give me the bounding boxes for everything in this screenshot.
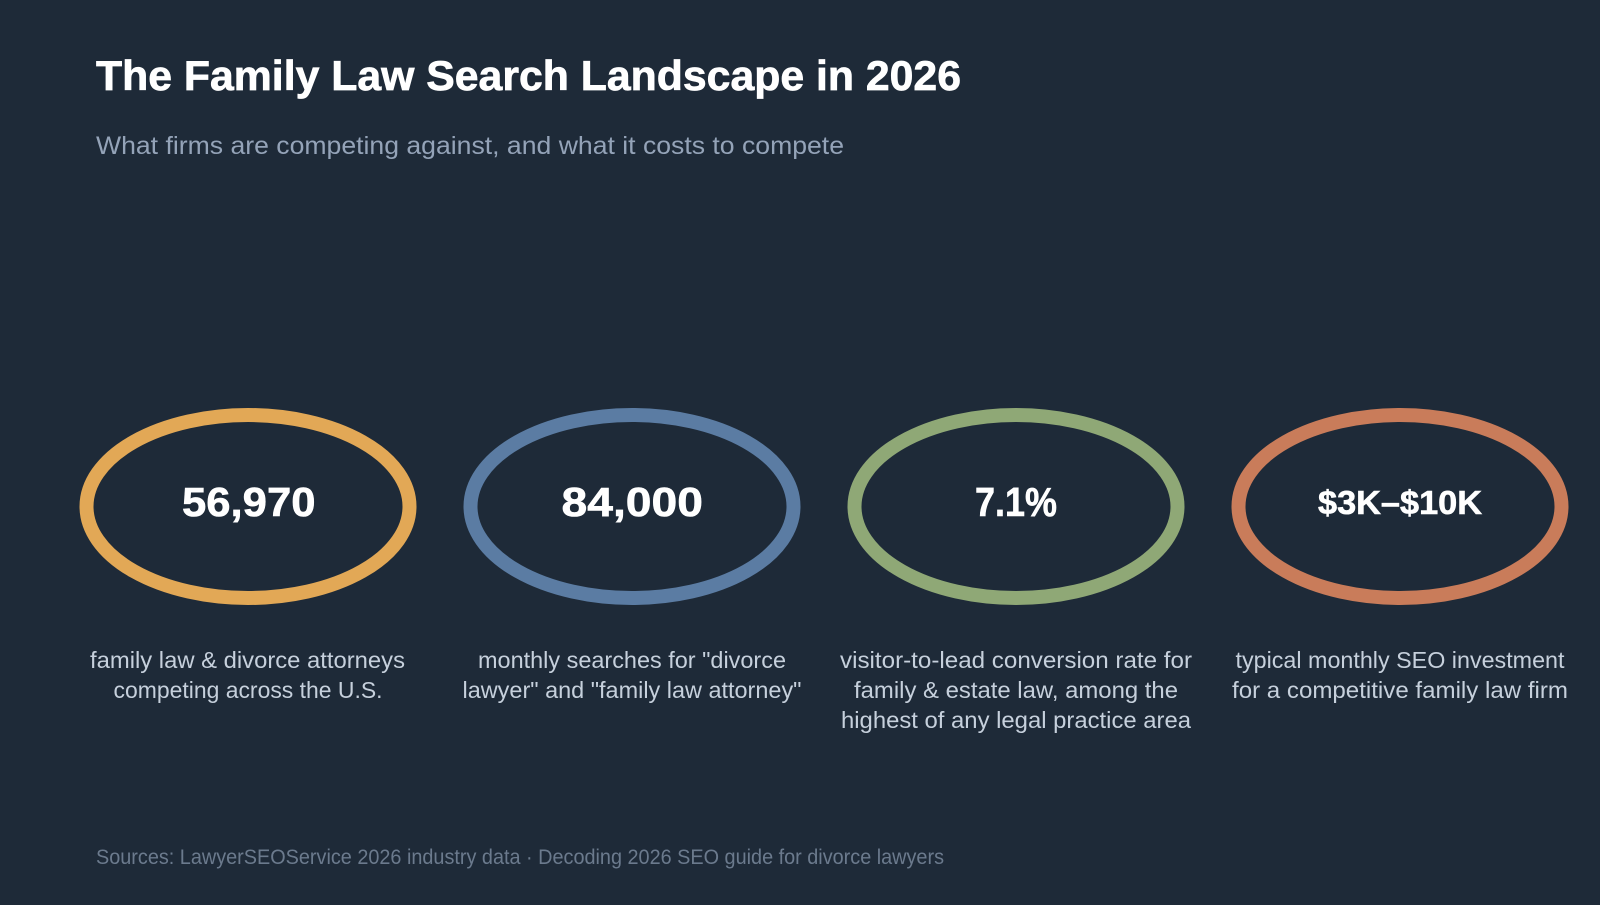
description: conversion rate: highest of any legal practice area [841, 707, 1191, 733]
number: $3K–$10K: $3K–$10K [1318, 484, 1482, 521]
footer sources: Sources: LawyerSEOService 2026 industry data · Decoding 2026 SEO guide for divorce lawyers [96, 846, 944, 869]
ring: amber [86, 415, 410, 598]
subtitle: What firms are competing against, and what it costs to compete [96, 132, 844, 160]
stat: conversion rate [840, 415, 1192, 733]
title: The Family Law Search Landscape in 2026 [96, 52, 961, 99]
description: SEO investment [1232, 647, 1568, 703]
stat: searches [462, 415, 802, 703]
ring: green [854, 415, 1178, 598]
description: searches [462, 647, 802, 703]
description: conversion rate: visitor-to-lead conversion rate for [840, 647, 1192, 673]
number: 56,970: 56,970 [182, 479, 316, 525]
stat: attorneys [86, 415, 410, 703]
description: SEO investment: typical monthly SEO investment [1236, 647, 1565, 673]
description: conversion rate: family & estate law, among the [854, 677, 1178, 703]
description: attorneys [90, 647, 405, 703]
number: 84,000: 84,000 [562, 479, 703, 525]
description: conversion rate [840, 647, 1192, 733]
stat: SEO investment [1232, 415, 1568, 703]
description: SEO investment: for a competitive family law firm [1232, 677, 1568, 703]
ring: blue [470, 415, 794, 598]
description: attorneys: family law & divorce attorneys [90, 647, 405, 673]
description: searches: monthly searches for "divorce [478, 647, 786, 673]
number: 7.1%: 7.1% [975, 479, 1057, 525]
description: searches: lawyer" and "family law attorney" [462, 677, 802, 703]
ring: terracotta [1238, 415, 1562, 598]
description: attorneys: competing across the U.S. [114, 677, 382, 703]
